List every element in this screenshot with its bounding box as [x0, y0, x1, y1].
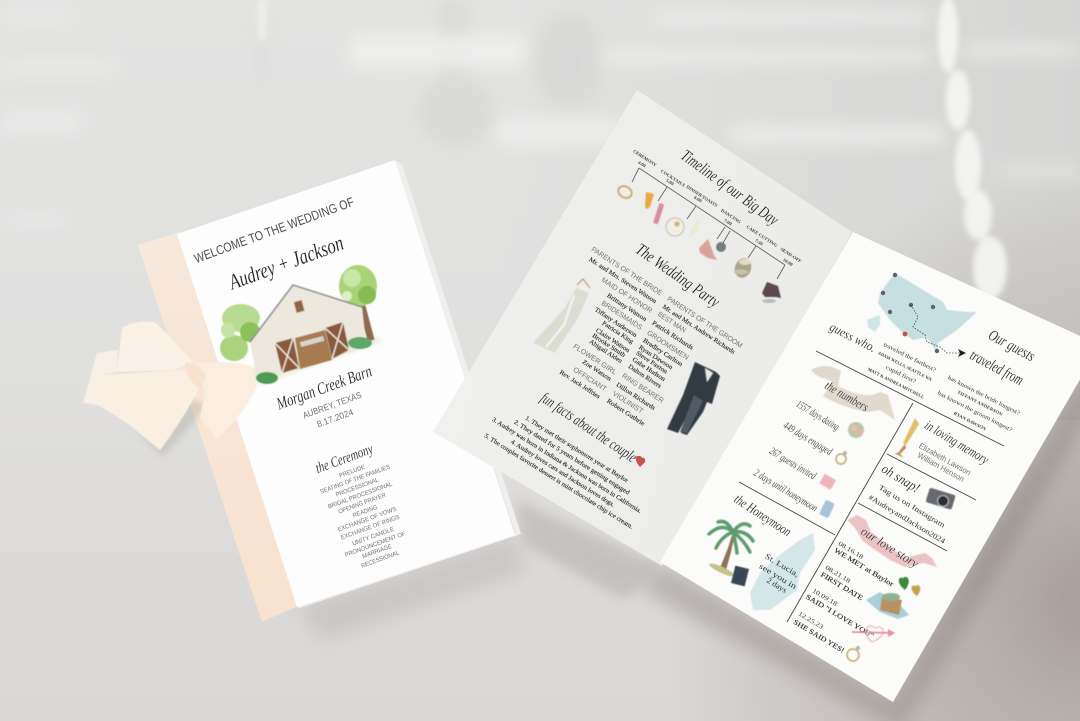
wedding party right column: GROOMSMEN	[645, 328, 691, 362]
wedding party left column: Rev. Jack Jeffries	[558, 369, 602, 401]
illustration: watercolor St. Lucia	[750, 533, 815, 610]
fun facts list: 5. The couples favorite dessert is mint chocolate chip ice cream.	[483, 433, 635, 531]
wedding party left column: Tiffany Anderson	[593, 306, 639, 339]
illustration: ribbon bow	[83, 322, 257, 457]
statistics list: 449 days engaged	[781, 419, 835, 458]
illustration: palm tree and passport	[708, 521, 753, 586]
venue location: AUBREY, TEXAS	[301, 390, 363, 420]
oh snap section	[867, 462, 947, 546]
wedding party right column: VIOLINIST	[611, 389, 646, 416]
honeymoon note: St. Lucia,	[763, 552, 800, 579]
ribbon strip along the spine	[138, 232, 300, 622]
timeline labels: DANCING	[720, 208, 742, 225]
timeline labels: CAKE CUTTING	[745, 224, 779, 248]
fun facts list: 4. Audrey loves cats and Jackson loves dogs.	[509, 439, 616, 509]
timeline labels: 7:30	[754, 238, 764, 247]
illustration: the numbers banner	[811, 366, 895, 420]
illustration: watercolor US map with hearts	[867, 273, 977, 357]
wedding party left column: FLOWER GIRL	[572, 342, 618, 376]
wedding party right column: Robert Guthrie	[605, 398, 646, 428]
ceremony order list: EXCHANGE OF RINGS	[340, 514, 401, 542]
heading: the honeymoon: the Honeymoon	[731, 492, 794, 540]
wedding party left column: MAID OF HONOR	[600, 275, 654, 315]
oh snap section: Tag us on Instagram	[877, 483, 947, 530]
timeline labels	[632, 149, 803, 267]
timeline labels: CEREMONY	[632, 149, 658, 168]
love story timeline	[792, 540, 896, 655]
oh snap section: oh snap!	[878, 462, 922, 497]
panel: closed program booklet	[83, 160, 521, 622]
heading: the numbers: the numbers	[822, 378, 872, 415]
cover heading: WELCOME TO THE WEDDING OF	[192, 194, 356, 266]
icons: bouquet, ring, envelope, suitcase	[819, 422, 864, 518]
guess who list	[867, 341, 1021, 434]
icon: red heart	[636, 456, 645, 467]
ceremony order list: BRIDAL PROCESSIONAL	[327, 481, 394, 511]
wedding party right column	[605, 294, 744, 428]
ceremony order list: PRONOUNCEMENT OF	[344, 530, 407, 559]
guess who list: ADAM WELLS, SEATTLE WA	[877, 350, 933, 382]
wedding party left column: Brooke Smith	[591, 332, 627, 359]
timeline labels: 10:00	[782, 257, 794, 267]
ceremony order list: PRELUDE	[338, 464, 366, 480]
oh snap section: #AudreyandJackson2024	[867, 493, 947, 546]
ceremony order list: EXCHANGE OF VOWS	[337, 506, 398, 534]
love story timeline: 08.21.18	[824, 564, 851, 585]
timeline labels: 5:00	[665, 178, 675, 187]
icon: candle	[894, 418, 919, 458]
wedding party right column: Dalton Rivers	[627, 363, 663, 390]
timeline line with drops	[632, 168, 785, 279]
love story timeline: 12.25.23	[797, 610, 824, 631]
wedding party right column: Ryan Dawson	[637, 344, 675, 372]
love story timeline: 08.16.18	[837, 540, 864, 561]
ceremony order list: READING	[352, 504, 379, 519]
heading: our love story: our love story	[858, 523, 922, 571]
heading: the wedding party: The Wedding Party	[632, 239, 724, 311]
guess who list: has known the groom longest?	[936, 390, 1013, 434]
in loving memory: William Henson	[916, 451, 966, 484]
wedding party left column: Claire Watson	[594, 327, 632, 355]
statistics list: 1557 days dating	[794, 398, 841, 433]
fun facts list: 3. Audrey was born in Indiana & Jackson was born in California.	[491, 416, 643, 515]
illustration: pink banner	[847, 515, 937, 567]
heading: timeline: Timeline of our Big Day	[677, 146, 782, 229]
timeline labels: COCKTAILS	[660, 168, 686, 188]
guess who list: TIFFANY ANDERSON	[957, 390, 1004, 417]
icons: hearts, picnic basket, arrow heart, ring	[847, 577, 920, 661]
love story timeline: SHE SAID YES!	[792, 618, 846, 655]
wedding party right column: Bradley Carlton	[641, 337, 685, 369]
heading: fun facts about the couple: fun facts about the couple	[537, 390, 640, 466]
honeymoon note: 2 days	[765, 576, 789, 595]
statistics list	[752, 398, 841, 515]
icon: camera	[926, 488, 956, 510]
wedding party left column: Patricia King	[601, 320, 635, 346]
love story timeline: WE MET at Baylor	[833, 546, 896, 589]
ceremony order list: UNITY CANDLE	[351, 526, 395, 547]
wedding party left column: Abigail Alden	[588, 338, 624, 365]
wedding party right column: Mr. and Mrs. Andrew Richards	[661, 304, 737, 356]
panel: open program, left page	[433, 90, 852, 566]
fun facts list: 2. They dated for 5 years before getting engaged	[513, 419, 631, 497]
love story timeline: SAID "I LOVE YOU"	[804, 593, 875, 640]
couple names: Audrey + Jackson	[224, 230, 347, 295]
illustration: wedding dress	[533, 279, 590, 353]
ceremony order list	[319, 464, 407, 570]
wedding party right column: BEST MAN	[656, 310, 688, 335]
ceremony order list: SEATING OF THE FAMILIES	[319, 464, 391, 496]
timeline labels: DINNER/TOASTS	[685, 184, 719, 208]
ceremony heading: the Ceremony	[314, 441, 376, 477]
wedding party right column: Gabe Hudson	[631, 356, 667, 383]
honeymoon note	[758, 552, 800, 595]
wedding party right column: RING BEARER	[620, 371, 666, 405]
ceremony order list: MARRIAGE	[361, 543, 393, 560]
fun facts list: 1. They met their sophomore year at Baylor	[524, 415, 630, 485]
guess who list: traveled the farthest?	[882, 341, 937, 374]
guess who list: has known the bride longest?	[946, 375, 1021, 417]
wedding party left column: OFFICIANT	[572, 365, 609, 393]
guess who list: MATT & ANDREA MITCHELL	[867, 367, 925, 400]
love story timeline: FIRST DATE	[819, 571, 864, 602]
timeline labels: 7:00	[723, 218, 733, 227]
wedding party left column: Zoe Watson	[581, 359, 613, 383]
ceremony order list: OPENING PRAYER	[338, 492, 387, 515]
venue name: Morgan Creek Barn	[273, 361, 374, 414]
wedding party left column: BRIDESMAIDS	[600, 298, 644, 332]
wedding party left column: Mr. and Mrs. Steven Watson	[588, 256, 658, 306]
wedding party right column: Patrick Richards	[651, 320, 695, 352]
illustration: groom tuxedo	[667, 362, 720, 435]
timeline labels: SEND-OFF	[780, 246, 803, 264]
ceremony order list: PROCESSIONAL	[335, 476, 380, 499]
love story timeline: 10.09.18	[811, 587, 838, 608]
wedding party left column: PARENTS OF THE BRIDE	[590, 245, 664, 297]
wedding party left column: Brittany Watson	[605, 292, 649, 324]
heading: our guests traveled from	[967, 327, 1038, 389]
heading: our guests traveled from: traveled from	[967, 347, 1026, 389]
in loving memory: Elizabeth Lawson	[917, 441, 972, 477]
back page edge	[297, 160, 521, 608]
statistics list: 2 days until honeymoon	[752, 467, 820, 515]
wedding party right column: PARENTS OF THE GROOM	[666, 294, 744, 350]
section divider lines	[739, 351, 1004, 622]
wedding party left column	[558, 245, 664, 401]
wedding party right column: Steve Paxton	[635, 350, 669, 376]
cover page	[177, 160, 515, 607]
in loving memory	[916, 418, 991, 484]
date: 8.17.2024	[315, 407, 355, 429]
ceremony order list: RECESSIONAL	[360, 549, 401, 570]
guess who list: cupid first?	[884, 364, 917, 385]
statistics list: 267 guests invited	[767, 445, 818, 482]
panel: open program, right page	[660, 232, 1080, 702]
shadows under programs	[297, 345, 1080, 721]
wedding party right column: Dillon Richards	[615, 381, 657, 412]
illustration: barn with trees	[220, 265, 385, 384]
guess who list: RYAN DAWSON	[953, 411, 988, 432]
heading: our guests traveled from: Our guests	[985, 327, 1038, 365]
timeline labels: 4:00	[637, 160, 647, 169]
honeymoon note: see you in	[758, 562, 798, 591]
icons: timeline illustrations	[616, 184, 781, 303]
in loving memory: in loving memory	[922, 418, 991, 468]
timeline labels: 6:00	[693, 195, 703, 204]
heading: guess who: guess who.	[827, 319, 879, 355]
